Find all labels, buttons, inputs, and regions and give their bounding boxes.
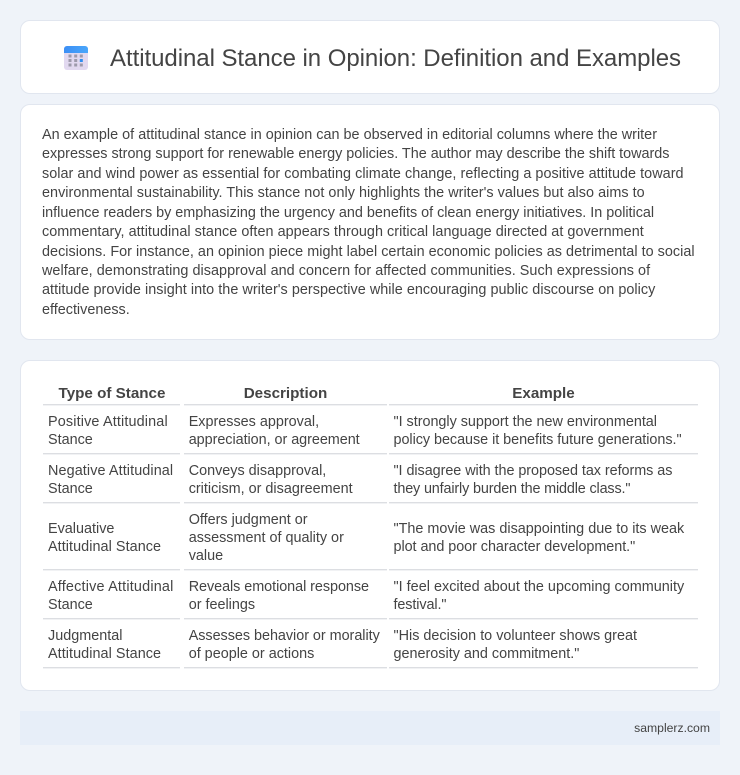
row: affective: Stance [48,597,93,613]
row: judgmental: generosity and commitment." [394,646,579,662]
row: evaluative [48,512,684,564]
row: positive [48,414,682,448]
row: positive: Positive Attitudinal [48,414,168,430]
intro paragraph text [42,127,695,318]
row: negative [48,463,672,497]
table header: Description [244,385,327,402]
row: affective: "I feel excited about the upcoming community [394,579,684,595]
table panel [20,360,720,691]
row: negative: Negative Attitudinal [48,463,173,479]
table header: Type of Stance [59,385,165,402]
row: evaluative: Offers judgment or [189,512,308,528]
row: judgmental [48,628,637,662]
row: negative: Stance [48,481,93,497]
row: affective: Reveals emotional response [189,579,369,595]
intro paragraph text: environmental sustainability. This stance not only highlights the writer's values but also aims to [42,185,645,201]
intro paragraph text: An example of attitudinal stance in opinion can be observed in editorial columns where the writer [42,127,657,143]
row: negative: "I disagree with the proposed tax reforms as [394,463,672,479]
intro paragraph text: effectiveness. [42,302,130,318]
row: evaluative: Evaluative [48,521,114,537]
row: negative: they unfairly burden the middle class." [394,481,630,497]
title: Attitudinal Stance in Opinion: Definition and Examples [110,45,681,72]
row: positive: "I strongly support the new environmental [394,414,657,430]
row: affective: Affective Attitudinal [48,579,174,595]
intro paragraph text: welfare, demonstrating disapproval and concern for affected communities. Such expressions of [42,263,650,279]
intro paragraph text: influence readers by emphasizing the urgency and benefits of clean energy initiatives. In political [42,205,654,221]
table: types of stance [43,385,698,669]
row: positive: policy because it benefits future generations." [394,432,682,448]
intro paragraph text: commentary, attitudinal stance often appears through critical language directed at government [42,224,644,240]
intro paragraph text: attitude provide insight into the writer's perspective while encouraging public discourse on policy [42,282,655,298]
intro paragraph text: expresses strong support for renewable energy policies. The author may describe the shift towards [42,146,669,162]
row: affective [48,579,684,613]
row: negative: criticism, or disagreement [189,481,353,497]
table header: Example [512,385,575,402]
row: judgmental: Attitudinal Stance [48,646,161,662]
row: affective: festival." [394,597,446,613]
row: judgmental: "His decision to volunteer shows great [394,628,637,644]
footer source text: samplerz.com [634,721,710,735]
row: evaluative: "The movie was disappointing due to its weak [394,521,684,537]
row: evaluative: value [189,548,223,564]
intro paragraph text: solar and wind power as essential for combating climate change, reflecting a positive attitude toward [42,166,684,182]
row: judgmental: Judgmental [48,628,122,644]
table header [58,385,575,402]
row: evaluative: plot and poor character development." [394,539,635,555]
row: affective: or feelings [189,597,255,613]
header panel [20,20,720,94]
row: positive: appreciation, or agreement [189,432,360,448]
row: judgmental: of people or actions [189,646,314,662]
intro paragraph panel [20,104,720,340]
intro paragraph text: decisions. For instance, an opinion piece might label certain economic policies as detrimental to social [42,244,695,260]
row: evaluative: assessment of quality or [189,530,344,546]
footer bar [20,711,720,745]
row: negative: Conveys disapproval, [189,463,326,479]
row: judgmental: Assesses behavior or morality [189,628,380,644]
row: positive: Stance [48,432,93,448]
row: positive: Expresses approval, [189,414,319,430]
row: evaluative: Attitudinal Stance [48,539,161,555]
icon: calendar [64,46,88,70]
